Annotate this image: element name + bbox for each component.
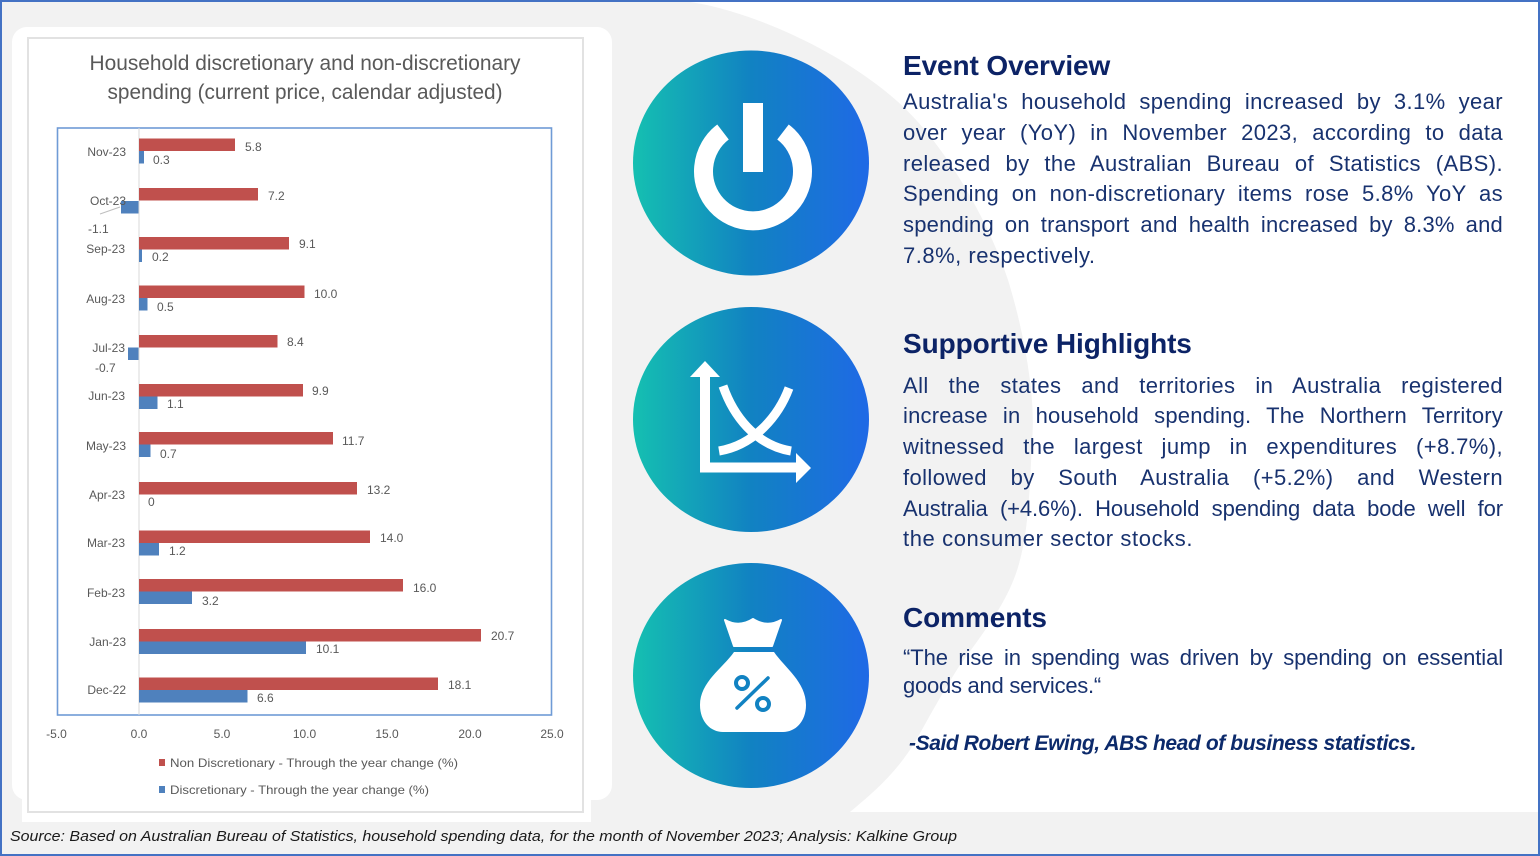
data labels: 5.8 bbox=[245, 140, 262, 154]
red bars: non discretionary bbox=[139, 138, 481, 690]
text: supportive highlights body: Australia (+4.6%). Household spending data bode well for bbox=[903, 496, 1503, 520]
data labels: 10.0 bbox=[314, 287, 338, 301]
text: event overview body bbox=[903, 88, 1503, 268]
chart title: Household discretionary and non-discretionary bbox=[90, 52, 521, 75]
heading: Comments: Comments bbox=[903, 602, 1047, 633]
text: supportive highlights body: followed by South Australia (+5.2%) and Western bbox=[903, 464, 1503, 490]
category labels: Mar-23 bbox=[87, 536, 125, 550]
data labels: 9.1 bbox=[299, 237, 316, 251]
data labels: 1.2 bbox=[169, 544, 186, 558]
category labels: Dec-22 bbox=[87, 683, 126, 697]
data labels: 16.0 bbox=[413, 581, 437, 595]
text: event overview body: spending on transport and health increased by 8.3% and bbox=[903, 212, 1503, 236]
data labels: 0.5 bbox=[157, 300, 174, 314]
data labels: 7.2 bbox=[268, 189, 285, 203]
plot frame bbox=[58, 128, 552, 715]
panel: chart card bbox=[12, 27, 612, 822]
category labels: Oct-23 bbox=[90, 194, 126, 208]
data labels: 0.7 bbox=[160, 447, 177, 461]
category labels: Jun-23 bbox=[88, 389, 125, 403]
data labels: -0.7 bbox=[95, 361, 116, 375]
legend bbox=[159, 756, 458, 797]
text: quote: “The rise in spending was driven by spending on essential bbox=[903, 645, 1503, 670]
data labels: 0.3 bbox=[153, 153, 170, 167]
text: event overview body: released by the Australian Bureau of Statistics (ABS). bbox=[903, 150, 1503, 176]
chart title: spending (current price, calendar adjusted) bbox=[108, 81, 502, 104]
data labels bbox=[88, 140, 515, 705]
text: event overview body: 7.8%, respectively. bbox=[903, 242, 1096, 268]
legend: Discretionary - Through the year change (%) bbox=[170, 783, 429, 797]
text: supportive highlights body: increase in household spending. The Northern Territory bbox=[903, 402, 1503, 428]
category labels: Aug-23 bbox=[86, 292, 125, 306]
chart title bbox=[90, 52, 521, 104]
x axis labels: 5.0 bbox=[214, 727, 231, 741]
text: attribution: -Said Robert Ewing, ABS head of business statistics. bbox=[909, 732, 1416, 755]
category labels: May-23 bbox=[86, 439, 126, 453]
heading: Supportive Highlights: Supportive Highlights bbox=[903, 328, 1192, 359]
data labels: 6.6 bbox=[257, 691, 274, 705]
data labels: 0 bbox=[148, 495, 155, 509]
text: supportive highlights body bbox=[903, 372, 1503, 550]
data labels: 9.9 bbox=[312, 384, 329, 398]
text: supportive highlights body: All the states and territories in Australia registered bbox=[903, 372, 1503, 398]
data labels: 20.7 bbox=[491, 629, 515, 643]
x axis labels: 10.0 bbox=[293, 727, 317, 741]
category labels: Feb-23 bbox=[87, 586, 125, 600]
text: supportive highlights body: the consumer sector stocks. bbox=[903, 526, 1193, 550]
text: supportive highlights body: witnessed the largest jump in expenditures (+8.7%), bbox=[903, 434, 1503, 458]
text: event overview body: over year (YoY) in November 2023, according to data bbox=[903, 120, 1503, 144]
x axis labels: 0.0 bbox=[131, 727, 148, 741]
text: event overview body: Spending on non-discretionary items rose 5.8% YoY as bbox=[903, 180, 1503, 206]
x axis labels: 25.0 bbox=[540, 727, 564, 741]
x axis labels bbox=[46, 727, 564, 741]
category labels: Jul-23 bbox=[92, 341, 125, 355]
icon: power button bbox=[633, 50, 869, 276]
data labels: -1.1 bbox=[88, 222, 109, 236]
icon: money bag with percent bbox=[633, 563, 869, 788]
data labels: 11.7 bbox=[342, 434, 365, 448]
category labels: Sep-23 bbox=[86, 242, 125, 256]
category labels: Apr-23 bbox=[89, 488, 125, 502]
category labels bbox=[86, 145, 126, 697]
data labels: 8.4 bbox=[287, 335, 304, 349]
blue bars: discretionary bbox=[121, 151, 306, 702]
x axis labels: -5.0 bbox=[46, 727, 67, 741]
source note: Source: Based on Australian Bureau of Statistics, household spending data, for the month of November 2023; Analysis: Kalkine Group bbox=[10, 828, 957, 845]
icon: crossing curves chart bbox=[633, 307, 869, 532]
category labels: Nov-23 bbox=[87, 145, 126, 159]
data labels: 3.2 bbox=[202, 594, 219, 608]
category labels: Jan-23 bbox=[89, 635, 126, 649]
text: quote bbox=[903, 645, 1503, 698]
x axis labels: 20.0 bbox=[458, 727, 482, 741]
heading: Event Overview: Event Overview bbox=[903, 50, 1110, 81]
x axis labels: 15.0 bbox=[375, 727, 399, 741]
data labels: 13.2 bbox=[367, 483, 391, 497]
data labels: 10.1 bbox=[316, 642, 340, 656]
data labels: 18.1 bbox=[448, 678, 472, 692]
legend: Non Discretionary - Through the year change (%) bbox=[170, 756, 458, 770]
chart: household discretionary and non-discretionary spending bbox=[46, 52, 564, 797]
data labels: 14.0 bbox=[380, 531, 404, 545]
text: quote: goods and services.“ bbox=[903, 673, 1101, 698]
text: event overview body: Australia's household spending increased by 3.1% year bbox=[903, 88, 1503, 114]
data labels: 0.2 bbox=[152, 250, 169, 264]
leader line bbox=[100, 207, 120, 214]
data labels: 1.1 bbox=[167, 397, 184, 411]
